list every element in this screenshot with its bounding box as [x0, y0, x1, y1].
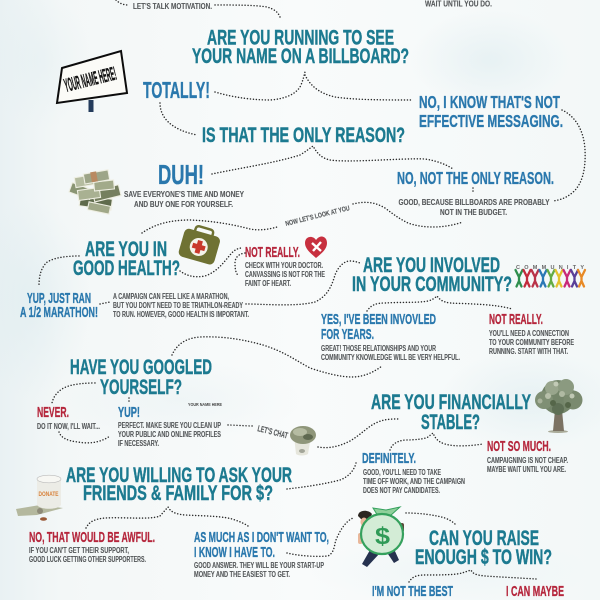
icon: broken heart: [305, 236, 327, 258]
question: billboard: YOUR NAME ON A BILLBOARD?: [192, 45, 409, 68]
text: get their support: IF YOU CAN'T GET THEIR SUPPORT,: [29, 545, 129, 555]
answer: not effective messaging: [419, 92, 563, 131]
question: raise enough: CAN YOU RAISE: [429, 527, 539, 550]
answer: yup: YUP!: [118, 404, 140, 421]
icon: man carrying money bag: $: [375, 523, 391, 550]
icon: money tree: [535, 379, 582, 433]
text: billboards not in budget: [398, 197, 550, 217]
icon: donation can: [16, 475, 63, 521]
text: relationships: [321, 343, 460, 362]
text: let's talk motivation: LET'S TALK MOTIVATION.: [133, 1, 212, 11]
text: your name here: YOUR NAME HERE: [188, 402, 223, 408]
icon: money plant: [290, 426, 316, 456]
question: googled: HAVE YOU GOOGLED: [70, 356, 212, 379]
question: raise enough: [415, 527, 552, 569]
text: need a connection: [489, 328, 574, 356]
question: financially stable: STABLE?: [421, 411, 480, 434]
answer: totally: TOTALLY!: [143, 77, 210, 103]
question: good health: ARE YOU IN: [85, 238, 167, 261]
text: take time off work: TIME OFF WORK, AND THE CAMPAIGN: [363, 476, 465, 486]
answer: as much as I don't want to: I KNOW I HAVE TO.: [194, 544, 275, 561]
question: billboard: [192, 26, 409, 68]
question: friends and family: FRIENDS & FAMILY FOR $?: [83, 482, 273, 505]
text: take time off work: [363, 467, 465, 495]
text: billboards not in budget: NOT IN THE BUDGET.: [440, 207, 507, 217]
text: check with your doctor: FAINT OF HEART.: [245, 278, 291, 288]
text: campaigning not cheap: [487, 455, 568, 474]
text: clean up profiles: IF NECESSARY.: [118, 438, 159, 448]
text: get their support: [29, 545, 146, 564]
text: take time off work: DOES NOT PAY CANDIDATES.: [363, 485, 440, 495]
text: start-up money: GOOD ANSWER. THEY WILL BE YOUR START-UP: [194, 560, 324, 570]
answer: not really (community): NOT REALLY.: [489, 312, 543, 328]
question: googled: YOURSELF?: [100, 376, 182, 399]
text: check with your doctor: CANVASSING IS NOT FOR THE: [245, 269, 325, 279]
question: financially stable: [371, 391, 531, 434]
text: take time off work: GOOD, YOU'LL NEED TO TAKE: [363, 467, 441, 477]
answer: not the best: I'M NOT THE BEST: [372, 583, 453, 600]
text: relationships: COMMUNITY KNOWLEDGE WILL BE VERY HELPFUL.: [321, 352, 460, 362]
text: get their support: GOOD LUCK GETTING OTHER SUPPORTERS.: [29, 554, 146, 564]
icon: billboard: [57, 51, 127, 112]
text: campaign like a marathon: TO RUN. HOWEVER, GOOD HEALTH IS IMPORTANT.: [113, 309, 249, 319]
question: community: ARE YOU INVOLVED: [363, 254, 500, 277]
question: good health: GOOD HEALTH?: [73, 257, 180, 280]
text: start-up money: [194, 560, 324, 579]
icon: man carrying money bag: [358, 507, 404, 567]
text: clean up profiles: PERFECT. MAKE SURE YOU CLEAN UP: [118, 420, 221, 430]
answer: yes, involved: FOR YEARS.: [321, 326, 374, 343]
answer: not really (health): NOT REALLY.: [245, 245, 300, 261]
question: billboard: ARE YOU RUNNING TO SEE: [207, 26, 394, 50]
question: friends and family: [66, 464, 292, 505]
question: community: [352, 254, 512, 296]
text: now let's look at you: NOW LET'S LOOK AT YOU: [285, 205, 351, 228]
text: clean up profiles: [118, 420, 221, 448]
icon: first aid kit: [178, 223, 223, 266]
question: only reason: IS THAT THE ONLY REASON?: [202, 124, 405, 147]
answer: definitely: DEFINITELY.: [362, 450, 416, 467]
text: YOUR NAME HERE!: [62, 64, 119, 97]
answer: never: NEVER.: [37, 405, 69, 421]
answer: as much as I don't want to: [194, 529, 329, 561]
answer: yup, marathon: [20, 290, 98, 321]
text: campaign like a marathon: [113, 291, 249, 319]
text: campaign like a marathon: A CAMPAIGN CAN FEEL LIKE A MARATHON,: [113, 291, 229, 301]
answer: as much as I don't want to: AS MUCH AS I DON'T WANT TO,: [194, 529, 329, 546]
answer: duh: DUH!: [158, 159, 204, 190]
answer: yes, involved: [321, 311, 436, 343]
text: relationships: GREAT! THOSE RELATIONSHIPS AND YOUR: [321, 343, 436, 353]
question: friends and family: ARE YOU WILLING TO ASK YOUR: [66, 464, 292, 487]
text: check with your doctor: [245, 260, 325, 288]
icon: community figures: COMMUNITY: [516, 265, 584, 271]
question: googled: [70, 356, 212, 399]
text: check with your doctor: CHECK WITH YOUR DOCTOR.: [245, 260, 323, 270]
icon: stack of money: [69, 170, 121, 214]
question: good health: [73, 238, 180, 280]
text: billboards not in budget: GOOD, BECAUSE BILLBOARDS ARE PROBABLY: [398, 197, 550, 207]
answer: not so much: NOT SO MUCH.: [487, 439, 551, 455]
text: campaign like a marathon: BUT YOU DON'T NEED TO BE TRIATHLON-READY: [113, 300, 243, 310]
question: community: IN YOUR COMMUNITY?: [352, 273, 512, 296]
text: buy one for yourself: [124, 189, 244, 209]
answer: yup, marathon: YUP, JUST RAN: [27, 290, 91, 307]
answer: no, awful: NO, THAT WOULD BE AWFUL.: [29, 529, 155, 546]
text: let's chat: LET'S CHAT: [257, 423, 289, 441]
answer: yes, involved: YES, I'VE BEEN INVOVLED: [321, 311, 436, 328]
icon: donation can: DONATE: [38, 492, 58, 498]
icon: community figures: [516, 265, 585, 286]
text: buy one for yourself: AND BUY ONE FOR YOURSELF.: [134, 199, 233, 209]
text: start-up money: MONEY AND THE EASIEST TO GET.: [194, 569, 290, 579]
text: do it now: DO IT NOW, I'LL WAIT...: [37, 421, 100, 431]
text: clean up profiles: YOUR PUBLIC AND ONLINE PROFILES: [118, 429, 221, 439]
text: buy one for yourself: SAVE EVERYONE'S TIME AND MONEY: [124, 189, 244, 199]
answer: yup, marathon: A 1/2 MARATHON!: [20, 304, 98, 321]
